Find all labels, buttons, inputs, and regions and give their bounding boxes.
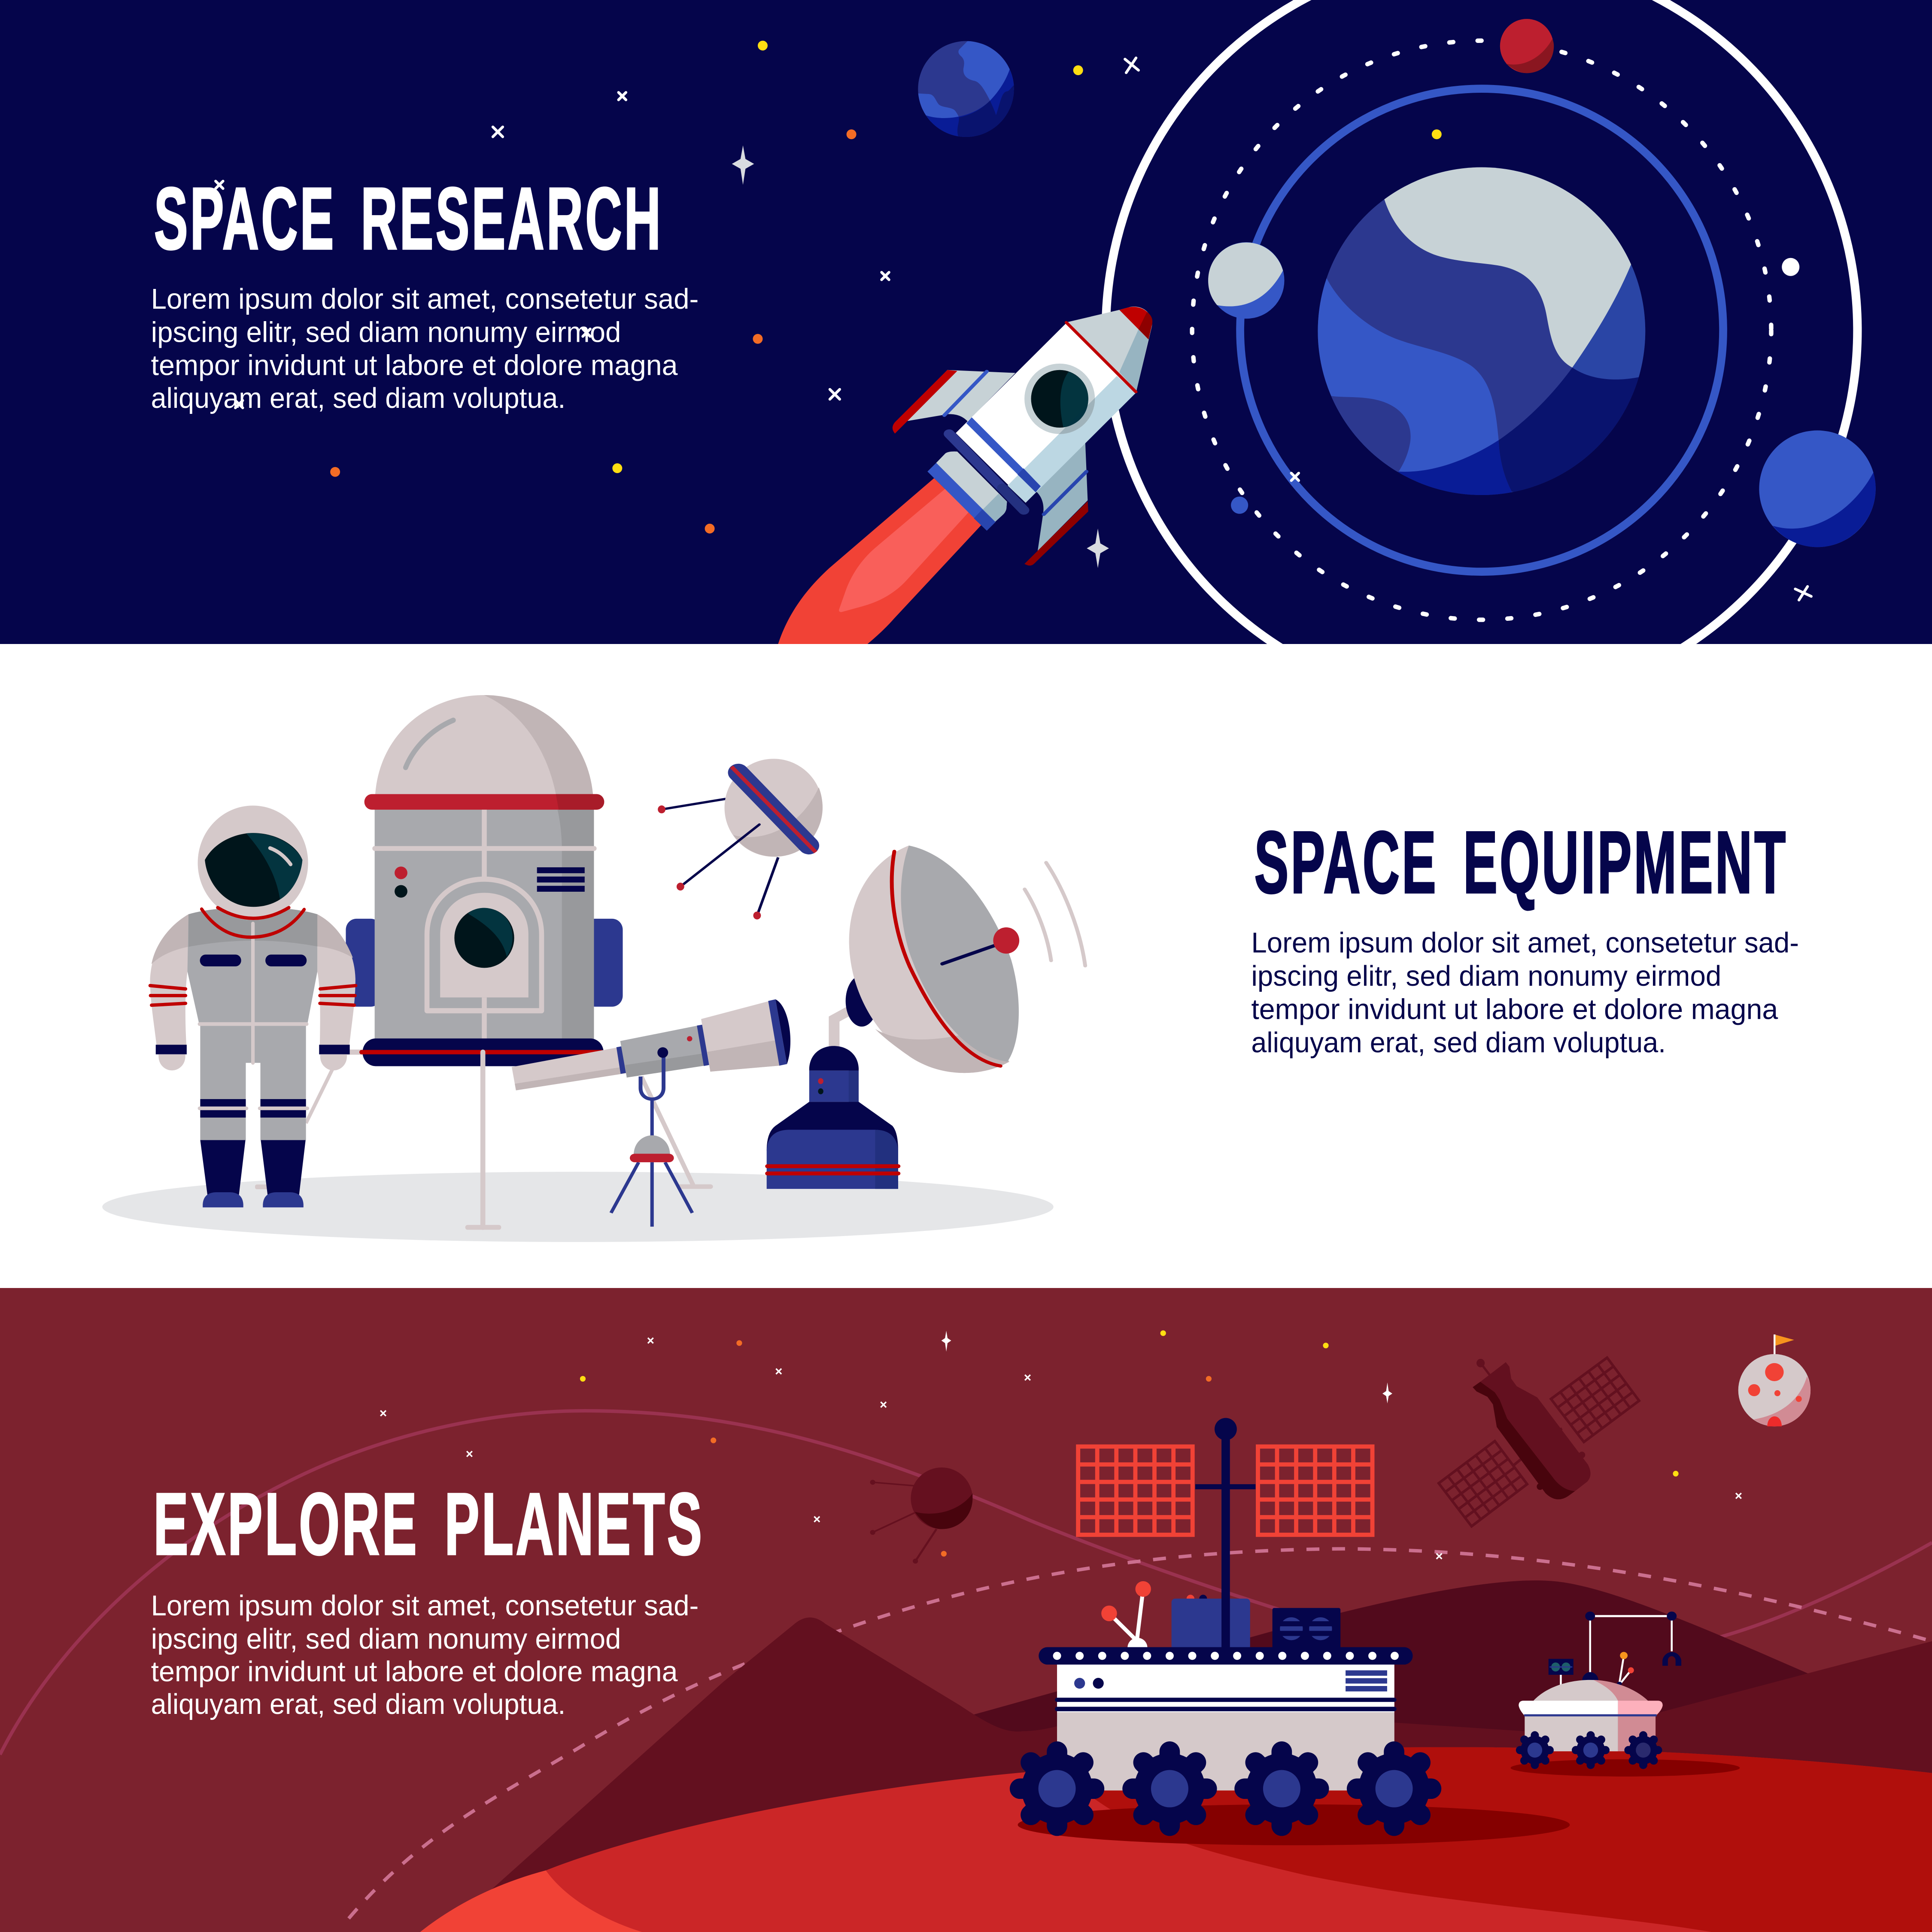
body text: [151, 1589, 699, 1720]
title: EXPLORE PLANETS: [153, 1475, 704, 1573]
pod and astronaut: [150, 695, 623, 1227]
astronaut: [150, 805, 356, 1207]
body text: tempor invidunt ut labore et dolore magna: [151, 349, 678, 381]
dim telescope satellite: [1439, 1358, 1639, 1526]
small blue dot planet: [1231, 497, 1248, 514]
orbiting planets: [1500, 19, 1876, 547]
four point stars: [732, 146, 1109, 568]
body text: aliquyam erat, sed diam voluptua.: [1251, 1027, 1666, 1059]
ground: [420, 1747, 1932, 1932]
blue inner orbit: [1240, 89, 1723, 572]
ground shaded area: [1060, 1747, 1932, 1932]
main rover: [1020, 1418, 1431, 1826]
dim sputnik: [870, 1467, 972, 1564]
satellite dish: [767, 845, 1085, 1189]
telescope: [512, 999, 790, 1227]
white outer orbit: [1106, 0, 1857, 706]
body text: aliquyam erat, sed diam voluptua.: [151, 382, 565, 414]
moon with flag: [1738, 1334, 1810, 1426]
grey moon: [1208, 242, 1285, 319]
body text: tempor invidunt ut labore et dolore magna: [151, 1656, 678, 1688]
telescope, satellite and dish: [512, 759, 1085, 1227]
yellow and orange stars: [330, 41, 1442, 534]
body text: Lorem ipsum dolor sit amet, consetetur sad-: [151, 1589, 699, 1622]
back hill: [936, 1580, 1848, 1750]
small rover: [1519, 1612, 1681, 1765]
body text: ipscing elitr, sed diam nonumy eirmod: [151, 1623, 621, 1655]
ground bright area: [420, 1871, 642, 1932]
earth planet: [916, 36, 1023, 143]
solar panel left: [1078, 1446, 1193, 1535]
body text: Lorem ipsum dolor sit amet, consetetur sad-: [151, 283, 699, 315]
body text: aliquyam erat, sed diam voluptua.: [151, 1688, 565, 1720]
panel: explore planets: [0, 1288, 1932, 1932]
body text: tempor invidunt ut labore et dolore magna: [1251, 993, 1778, 1025]
space pod: [346, 695, 623, 1227]
dashed orbit curve: [349, 1549, 1932, 1918]
body text: [1251, 927, 1799, 1059]
white x stars: [216, 58, 1811, 600]
dotted orbit: [1192, 41, 1771, 620]
astronaut prop stick: [255, 1052, 364, 1189]
title: SPACE RESEARCH: [154, 170, 663, 268]
large planet: [1302, 155, 1665, 519]
sputnik satellite: [658, 759, 823, 920]
orbit curve: [0, 1411, 1932, 1755]
rover deck equipment: [1101, 1418, 1340, 1652]
body text: [151, 283, 699, 414]
rocket: [777, 307, 1152, 647]
panel: space equipment: [0, 644, 1932, 1288]
rover shadows: [1018, 1759, 1740, 1845]
rover wheels: [1020, 1752, 1431, 1826]
rover body: [1039, 1647, 1413, 1790]
panel: space research: [0, 0, 1932, 706]
ground ellipse: [102, 1172, 1054, 1242]
body text: ipscing elitr, sed diam nonumy eirmod: [151, 316, 621, 348]
body text: ipscing elitr, sed diam nonumy eirmod: [1251, 960, 1721, 992]
stars: [380, 1331, 1741, 1559]
body text: Lorem ipsum dolor sit amet, consetetur sad-: [1251, 927, 1799, 959]
solar panel right: [1258, 1446, 1373, 1535]
front hills: [487, 1617, 1932, 1932]
